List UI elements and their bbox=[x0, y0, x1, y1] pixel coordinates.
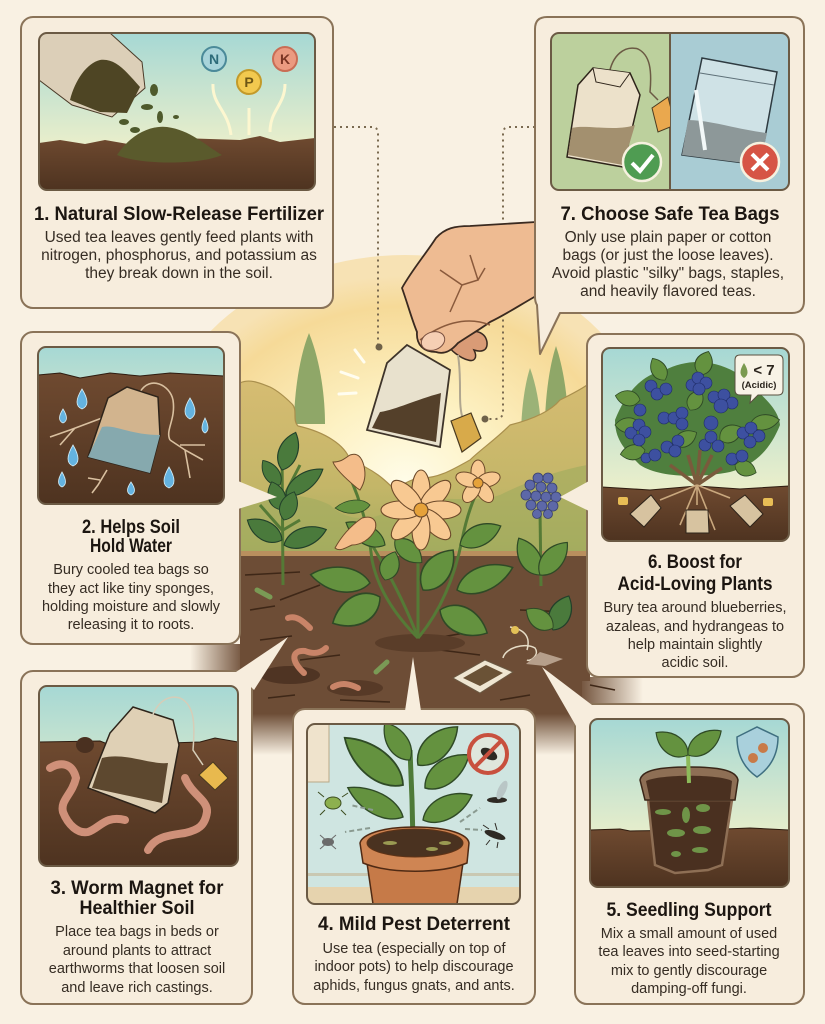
body text: tea leaves into seed-starting bbox=[598, 944, 780, 960]
central flowering plant bbox=[309, 454, 517, 644]
image frame bbox=[551, 33, 789, 190]
body text: earthworms that loosen soil bbox=[49, 961, 225, 977]
title: 5. Seedling Support bbox=[606, 899, 772, 921]
garden hedges bbox=[240, 381, 587, 556]
image frame bbox=[590, 719, 789, 887]
body text: damping-off fungi. bbox=[631, 981, 747, 997]
panel 1: natural slow-release fertilizer bbox=[21, 17, 333, 308]
cypress trees bbox=[294, 333, 568, 436]
panel 3: worm magnet bbox=[21, 637, 288, 1004]
no-pest sign bbox=[469, 735, 507, 773]
body text: indoor pots) to help discourage bbox=[314, 959, 514, 975]
buried tea bags bbox=[630, 495, 763, 533]
illustration: safe and unsafe bags bbox=[551, 33, 789, 190]
pointer tail bbox=[560, 481, 589, 511]
soil ground bbox=[190, 556, 643, 755]
connector dots bbox=[376, 344, 488, 422]
blueberry plant bbox=[509, 473, 578, 636]
hand holding tea bag bbox=[339, 222, 536, 452]
image frame bbox=[39, 33, 315, 190]
pointer tail bbox=[542, 667, 592, 726]
body text: nitrogen, phosphorus, and potassium as bbox=[41, 247, 317, 264]
pH callout: < 7 bbox=[753, 362, 775, 379]
body text: and leave rich castings. bbox=[61, 980, 213, 996]
body text: they break down in the soil. bbox=[85, 265, 273, 282]
pH callout: (Acidic) bbox=[742, 380, 776, 391]
right small flower bbox=[454, 460, 502, 506]
dotted connector: safe bags to tag bbox=[486, 127, 535, 419]
illustration: blueberry bush bbox=[602, 348, 789, 541]
body text: they act like tiny sponges, bbox=[48, 581, 214, 597]
sun glow sky bbox=[155, 255, 655, 665]
title: 3. Worm Magnet for bbox=[50, 877, 224, 899]
image frame bbox=[38, 347, 224, 504]
body text: acidic soil. bbox=[662, 655, 728, 671]
hand bbox=[402, 222, 536, 353]
NPK circles: N bbox=[209, 51, 219, 67]
body text: aphids, fungus gnats, and ants. bbox=[313, 978, 515, 994]
pointer tail bbox=[238, 481, 277, 509]
pointer tail bbox=[405, 657, 421, 711]
body text: holding moisture and slowly bbox=[42, 599, 221, 615]
string and tag bbox=[458, 355, 462, 416]
body text: and heavily flavored teas. bbox=[580, 283, 756, 300]
title: 4. Mild Pest Deterrent bbox=[318, 913, 510, 935]
flower buds bbox=[333, 454, 376, 550]
illustration: seedling in pot bbox=[590, 719, 789, 887]
title: 1. Natural Slow-Release Fertilizer bbox=[34, 203, 324, 225]
title: 6. Boost for bbox=[648, 551, 742, 573]
title: Healthier Soil bbox=[80, 897, 194, 919]
used tea bag on soil bbox=[453, 626, 563, 693]
body text: Place tea bags in beds or bbox=[55, 924, 219, 940]
title: Hold Water bbox=[90, 535, 172, 557]
image frame bbox=[307, 724, 520, 904]
image frame bbox=[39, 686, 238, 866]
pests bbox=[318, 779, 510, 849]
body text: Mix a small amount of used bbox=[601, 926, 777, 942]
illustration: tea leaves and NPK nutrients bbox=[39, 33, 315, 190]
shimmer lines bbox=[339, 350, 364, 394]
central garden scene bbox=[155, 255, 655, 755]
panel 4: mild pest deterrent bbox=[293, 657, 535, 1004]
tea bag bbox=[367, 345, 450, 447]
unsafe plastic bag bbox=[682, 58, 777, 165]
body text: help maintain slightly bbox=[628, 637, 763, 653]
body text: Used tea leaves gently feed plants with bbox=[45, 229, 313, 246]
safe paper bag bbox=[567, 48, 675, 167]
pH callout bbox=[735, 355, 783, 403]
title: 2. Helps Soil bbox=[82, 516, 180, 538]
body text: Bury tea around blueberries, bbox=[604, 600, 786, 616]
pointer tail bbox=[236, 637, 288, 690]
NPK circles bbox=[202, 47, 297, 94]
NPK circles: K bbox=[280, 51, 290, 67]
panel 5: seedling support bbox=[542, 667, 804, 1004]
body text: around plants to attract bbox=[63, 943, 211, 959]
image frame bbox=[602, 348, 789, 541]
earthworms bbox=[257, 590, 387, 688]
thumb nail bbox=[419, 328, 447, 354]
body text: mix to gently discourage bbox=[611, 963, 767, 979]
illustration: potted plant and pests bbox=[307, 717, 520, 904]
bush canopy bbox=[615, 362, 780, 476]
body text: azaleas, and hydrangeas to bbox=[606, 619, 784, 635]
title: Acid-Loving Plants bbox=[618, 573, 773, 595]
body text: Use tea (especially on top of bbox=[323, 941, 506, 957]
illustration: worms around tea bag bbox=[39, 686, 238, 866]
body text: bags (or just the loose leaves). bbox=[562, 247, 774, 264]
hand creases bbox=[420, 255, 490, 340]
panel 7: choose safe tea bags bbox=[535, 17, 804, 354]
dotted connector: fertilizer to bag bbox=[334, 127, 378, 345]
main flower bbox=[381, 470, 461, 550]
body text: releasing it to roots. bbox=[68, 617, 194, 633]
body text: Only use plain paper or cotton bbox=[565, 229, 771, 246]
panel 2: helps soil hold water bbox=[21, 332, 277, 644]
title: 7. Choose Safe Tea Bags bbox=[560, 203, 780, 225]
tea inside bag bbox=[372, 393, 441, 442]
body text: Bury cooled tea bags so bbox=[53, 562, 209, 578]
NPK circles: P bbox=[244, 74, 254, 90]
illustration: tea bag sponge bbox=[38, 347, 224, 504]
curled fingers bbox=[448, 331, 487, 361]
panel 6: acid-loving plants bbox=[560, 334, 804, 677]
shield bbox=[737, 727, 778, 777]
body text: Avoid plastic "silky" bags, staples, bbox=[552, 265, 784, 282]
left green plant bbox=[242, 429, 329, 585]
